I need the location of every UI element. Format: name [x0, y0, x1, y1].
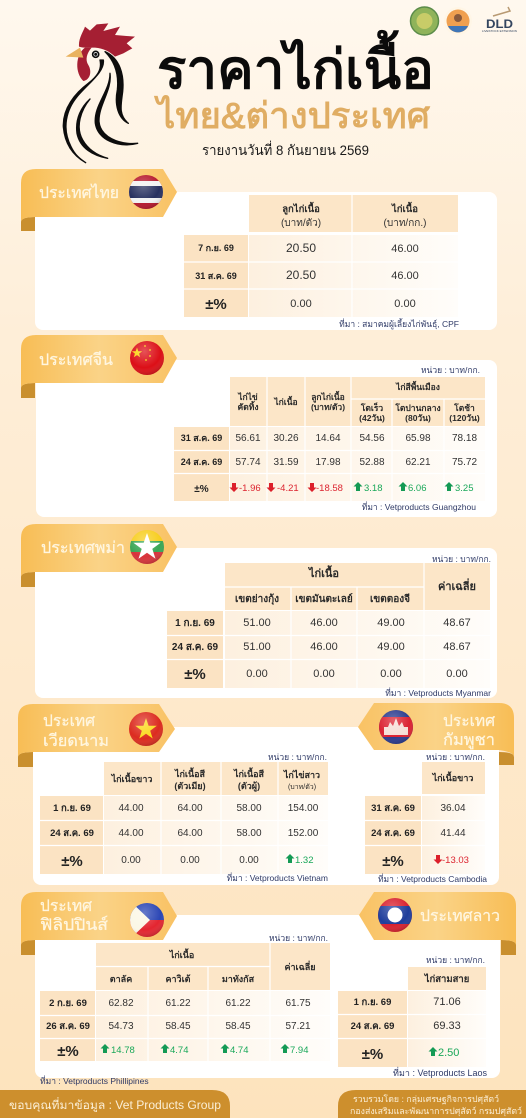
panel: Vietnam	[18, 704, 328, 883]
banner: Cambodia: ประเทศ	[443, 713, 495, 730]
table: Cambodia: 41.44	[440, 828, 466, 839]
table: Myanmar: 46.00	[310, 641, 338, 653]
banner: Vietnam	[18, 704, 175, 767]
panel: China	[21, 335, 497, 517]
table: Cambodia	[365, 762, 485, 874]
table: Thailand: 20.50	[286, 268, 316, 282]
banner: Laos	[359, 892, 516, 955]
table: China: (บาท/ตัว)	[311, 402, 345, 412]
table: Philippines: 61.22	[225, 998, 251, 1009]
footer: compiled by: รวบรวมโดย : กลุ่มเศรษฐกิจการปศุสัตว์	[353, 1094, 499, 1105]
table: Myanmar: 49.00	[377, 617, 405, 629]
banner: Philippines: ฟิลิปปินส์	[40, 915, 108, 934]
table: Laos: 71.06	[433, 996, 461, 1008]
table: Vietnam: 44.00	[118, 828, 144, 839]
table: China: 31.59	[273, 457, 299, 468]
table: China: ไก่ไข่	[237, 392, 258, 402]
table: China: 30.26	[273, 433, 299, 444]
unit: Vietnam: หน่วย : บาท/กก.	[268, 752, 327, 762]
table: Myanmar: 24 ส.ค. 69	[172, 642, 219, 653]
table: Vietnam: 154.00	[288, 803, 319, 814]
table: Vietnam: ไก่เนื้อสี	[174, 767, 206, 779]
table: Philippines: คาวิเต้	[165, 974, 191, 984]
table: Thailand: ไก่เนื้อ	[391, 201, 418, 215]
banner: Philippines: ประเทศ	[40, 898, 92, 915]
rooster feathers	[63, 51, 138, 163]
table: Philippines: 2 ก.ย. 69	[49, 998, 87, 1009]
table: Philippines: 7.94	[290, 1045, 308, 1056]
table: Vietnam: ไก่เนื้อขาว	[111, 772, 152, 784]
table: China: 31 ส.ค. 69	[181, 433, 222, 443]
table: Philippines: 4.74	[230, 1045, 248, 1056]
table: Philippines: ±%	[57, 1043, 79, 1060]
table: Laos: 1 ก.ย. 69	[354, 997, 391, 1008]
panel: Vietnam and Cambodia card	[33, 727, 499, 885]
table: Myanmar: 51.00	[243, 617, 271, 629]
table: Vietnam: 152.00	[288, 828, 319, 839]
icon: Philippines flag	[130, 903, 164, 937]
footer: compiled by: กองส่งเสริมและพัฒนาการปศุสัตว์ กรมปศุสัตว์	[350, 1106, 522, 1117]
table: China: 3.25	[455, 483, 474, 494]
table: Laos: 69.33	[433, 1020, 461, 1032]
table: Philippines: 4.74	[170, 1045, 188, 1056]
table: Philippines: ไก่เนื้อ	[169, 948, 194, 960]
table: Myanmar: 49.00	[377, 641, 405, 653]
table: Myanmar: เขตมันตะเลย์	[295, 593, 353, 605]
table: Philippines: มาทังกัส	[222, 974, 255, 984]
table: Laos: ไก่สามสาย	[424, 973, 469, 985]
table: China: 24 ส.ค. 69	[181, 457, 222, 467]
table: Philippines: 57.21	[285, 1021, 311, 1032]
footer: compiled by	[338, 1090, 526, 1118]
table: Vietnam	[40, 762, 328, 874]
title: ราคาไก่เนื้อ	[157, 31, 434, 100]
source: China: ที่มา : Vetproducts Guangzhou	[362, 501, 476, 512]
table: China: คัดทิ้ง	[238, 400, 258, 412]
banner: Laos: ประเทศลาว	[420, 908, 500, 925]
table: Myanmar: ±%	[184, 666, 206, 683]
table: Vietnam: 64.00	[177, 828, 203, 839]
table: Myanmar: 51.00	[243, 641, 271, 653]
panel: Philippines	[21, 892, 330, 1086]
icon: China flag	[130, 341, 164, 375]
banner: Cambodia: กัมพูชา	[443, 732, 495, 750]
table: China: ลูกไก่เนื้อ	[311, 390, 345, 403]
banner: Vietnam: ประเทศ	[43, 713, 95, 730]
table: Thailand: 20.50	[286, 241, 316, 255]
table: China: 65.98	[405, 433, 431, 444]
table: Myanmar: 46.00	[310, 617, 338, 629]
table: Thailand: 7 ก.ย. 69	[198, 243, 234, 253]
banner: China	[21, 335, 177, 398]
unit: Cambodia: หน่วย : บาท/กก.	[426, 752, 485, 762]
rooster comb	[79, 23, 135, 57]
table: Myanmar: 48.67	[443, 617, 471, 629]
banner: Vietnam: เวียดนาม	[43, 732, 109, 750]
table: Thailand: ±%	[205, 296, 227, 313]
table: Philippines: 26 ส.ค. 69	[46, 1021, 90, 1032]
table: Thailand: ลูกไก่เนื้อ	[282, 201, 320, 216]
table: China: 78.18	[452, 433, 477, 444]
table: Myanmar: 0.00	[380, 668, 402, 680]
table: China	[174, 377, 485, 501]
table: Vietnam: 0.00	[180, 855, 200, 866]
unit: Philippines: หน่วย : บาท/กก.	[269, 933, 328, 943]
table: Vietnam: (ตัวผู้)	[238, 781, 260, 792]
table: Cambodia: 31 ส.ค. 69	[371, 803, 415, 814]
table: China: 3.18	[364, 483, 382, 494]
table: Myanmar	[167, 563, 490, 688]
table: Vietnam: 24 ส.ค. 69	[50, 828, 94, 839]
table: Philippines: 58.45	[225, 1021, 251, 1032]
table: Vietnam: 64.00	[177, 803, 203, 814]
table: Myanmar: 48.67	[443, 641, 471, 653]
source: Cambodia: ที่มา : Vetproducts Cambodia	[378, 873, 487, 884]
table: Vietnam: ไก่เนื้อสี	[233, 767, 265, 779]
table: Vietnam: (ตัวเมีย)	[174, 781, 206, 791]
table: Thailand: 31 ส.ค. 69	[195, 271, 237, 281]
table: Myanmar: ค่าเฉลี่ย	[438, 578, 476, 593]
panel: Thailand	[21, 169, 497, 330]
table: China: โตช้า	[453, 403, 475, 413]
table: Vietnam: ±%	[61, 853, 83, 870]
table: China: 52.88	[359, 457, 385, 468]
table: Cambodia: ไก่เนื้อขาว	[432, 771, 473, 783]
table: China: โตปานกลาง	[394, 403, 441, 413]
source: Philippines: ที่มา : Vetproducts Phillipines	[40, 1075, 149, 1086]
panel: Cambodia	[358, 703, 514, 884]
table: Philippines: 14.78	[111, 1045, 135, 1056]
table: Thailand: 0.00	[394, 298, 416, 310]
logo: DLD: DLD	[486, 17, 513, 31]
table: Vietnam: 1 ก.ย. 69	[53, 803, 91, 814]
table: Myanmar: 0.00	[446, 668, 468, 680]
table: China: ±%	[194, 484, 209, 495]
table: Vietnam: ไก่ไข่สาว	[283, 769, 320, 780]
table: Vietnam: 44.00	[118, 803, 144, 814]
table: China: 14.64	[315, 433, 341, 444]
table: Laos	[338, 967, 486, 1067]
table: China: (120วัน)	[449, 413, 480, 423]
logo: department seal	[444, 7, 472, 35]
footer: data credit: ขอบคุณที่มาข้อมูล : Vet Products Group	[9, 1097, 221, 1112]
table: China: -1.96	[239, 483, 261, 494]
table: Myanmar: 0.00	[246, 668, 268, 680]
banner: Cambodia	[358, 703, 514, 765]
table: Philippines: 54.73	[108, 1021, 134, 1032]
table: China: 56.61	[235, 433, 261, 444]
table: Myanmar: 1 ก.ย. 69	[175, 618, 215, 629]
panel: Laos	[338, 892, 516, 1078]
rooster beak	[66, 48, 83, 58]
logo: ministry seal	[410, 7, 438, 35]
table: Myanmar: เขตตองจี	[370, 593, 410, 605]
table: Vietnam: 1.32	[295, 855, 314, 866]
table: Vietnam: (บาท/ตัว)	[288, 783, 316, 791]
banner: Myanmar	[21, 524, 177, 587]
icon: Vietnam flag	[129, 712, 163, 746]
logo: DLD	[482, 7, 517, 33]
table: Myanmar: เขตย่างกุ้ง	[235, 593, 279, 605]
unit: Myanmar: หน่วย : บาท/กก.	[432, 554, 491, 564]
table: China: -4.21	[277, 483, 299, 494]
banner: Philippines	[21, 892, 177, 955]
table: Vietnam: 0.00	[121, 855, 141, 866]
table: China: 54.56	[359, 433, 385, 444]
table: Laos: 2.50	[438, 1047, 459, 1059]
table: Thailand: (บาท/กก.)	[384, 218, 426, 229]
table: Thailand: 0.00	[290, 298, 312, 310]
table: China: -18.58	[316, 483, 343, 494]
table: China: 57.74	[235, 457, 261, 468]
table: Vietnam: 0.00	[239, 855, 259, 866]
panel: Myanmar	[21, 524, 497, 698]
unit: China: หน่วย : บาท/กก.	[421, 365, 480, 375]
table: Thailand: 46.00	[391, 243, 419, 255]
source: Vietnam: ที่มา : Vetproducts Vietnam	[227, 872, 328, 883]
table: Thailand	[184, 195, 458, 317]
rooster wattle	[77, 48, 92, 81]
banner: Thailand	[21, 169, 177, 231]
table: Vietnam: 58.00	[236, 803, 262, 814]
unit: Laos: หน่วย : บาท/กก.	[426, 955, 485, 965]
table: Philippines: 62.82	[108, 998, 134, 1009]
banner: Thailand: ประเทศไทย	[39, 183, 119, 202]
panel: Philippines and Laos card	[35, 915, 500, 1078]
table: China: 62.21	[405, 457, 431, 468]
table: Thailand: 46.00	[391, 270, 419, 282]
banner: Myanmar: ประเทศพม่า	[41, 540, 125, 557]
source: Myanmar: ที่มา : Vetproducts Myanmar	[385, 687, 491, 698]
table: Laos: 24 ส.ค. 69	[351, 1021, 394, 1032]
table: Cambodia: ±%	[382, 853, 404, 870]
table: Philippines: ค่าเฉลี่ย	[284, 960, 316, 972]
table: China: (42วัน)	[359, 413, 385, 423]
table: Philippines: 61.22	[165, 998, 191, 1009]
table: China: ไก่สีพื้นเมือง	[395, 380, 440, 392]
footer: data credit	[0, 1090, 230, 1118]
subtitle: ไทย&ต่างประเทศ	[154, 95, 430, 136]
icon: Thai flag	[129, 175, 163, 209]
table: China: ไก่เนื้อ	[273, 395, 298, 407]
table: China: 75.72	[452, 457, 477, 468]
table: Vietnam: 58.00	[236, 828, 262, 839]
table: Philippines	[40, 943, 330, 1061]
table: Cambodia: -13.03	[442, 855, 469, 866]
table: Cambodia: 24 ส.ค. 69	[371, 828, 415, 839]
icon: rooster logo	[63, 23, 138, 163]
logos	[410, 7, 517, 35]
table: Philippines: 61.75	[285, 998, 311, 1009]
table: Myanmar: 0.00	[313, 668, 335, 680]
table: Myanmar: ไก่เนื้อ	[307, 565, 339, 580]
table: Thailand: (บาท/ตัว)	[281, 218, 321, 229]
source: Thailand: ที่มา : สมาคมผู้เลี้ยงไก่พันธุ์, CPF	[339, 318, 459, 330]
table: China: 17.98	[315, 457, 341, 468]
logo: DLD: LIVESTOCK EXTENSION	[482, 29, 517, 33]
table: Philippines: ตาลัค	[110, 974, 132, 984]
icon: Myanmar flag	[130, 530, 164, 564]
table: China: 6.06	[408, 483, 426, 494]
table: China: โตเร็ว	[360, 401, 383, 413]
source: Laos: ที่มา : Vetproducts Laos	[393, 1066, 487, 1078]
table: Philippines: 58.45	[165, 1021, 191, 1032]
table: China: (80วัน)	[405, 413, 431, 423]
icon: Cambodia flag	[379, 710, 413, 744]
table: Cambodia: 36.04	[440, 803, 466, 814]
report date: รายงานวันที่ 8 กันยายน 2569	[202, 141, 369, 158]
icon: Laos flag	[378, 898, 412, 932]
banner: China: ประเทศจีน	[39, 351, 113, 369]
table: Laos: ±%	[362, 1046, 383, 1063]
